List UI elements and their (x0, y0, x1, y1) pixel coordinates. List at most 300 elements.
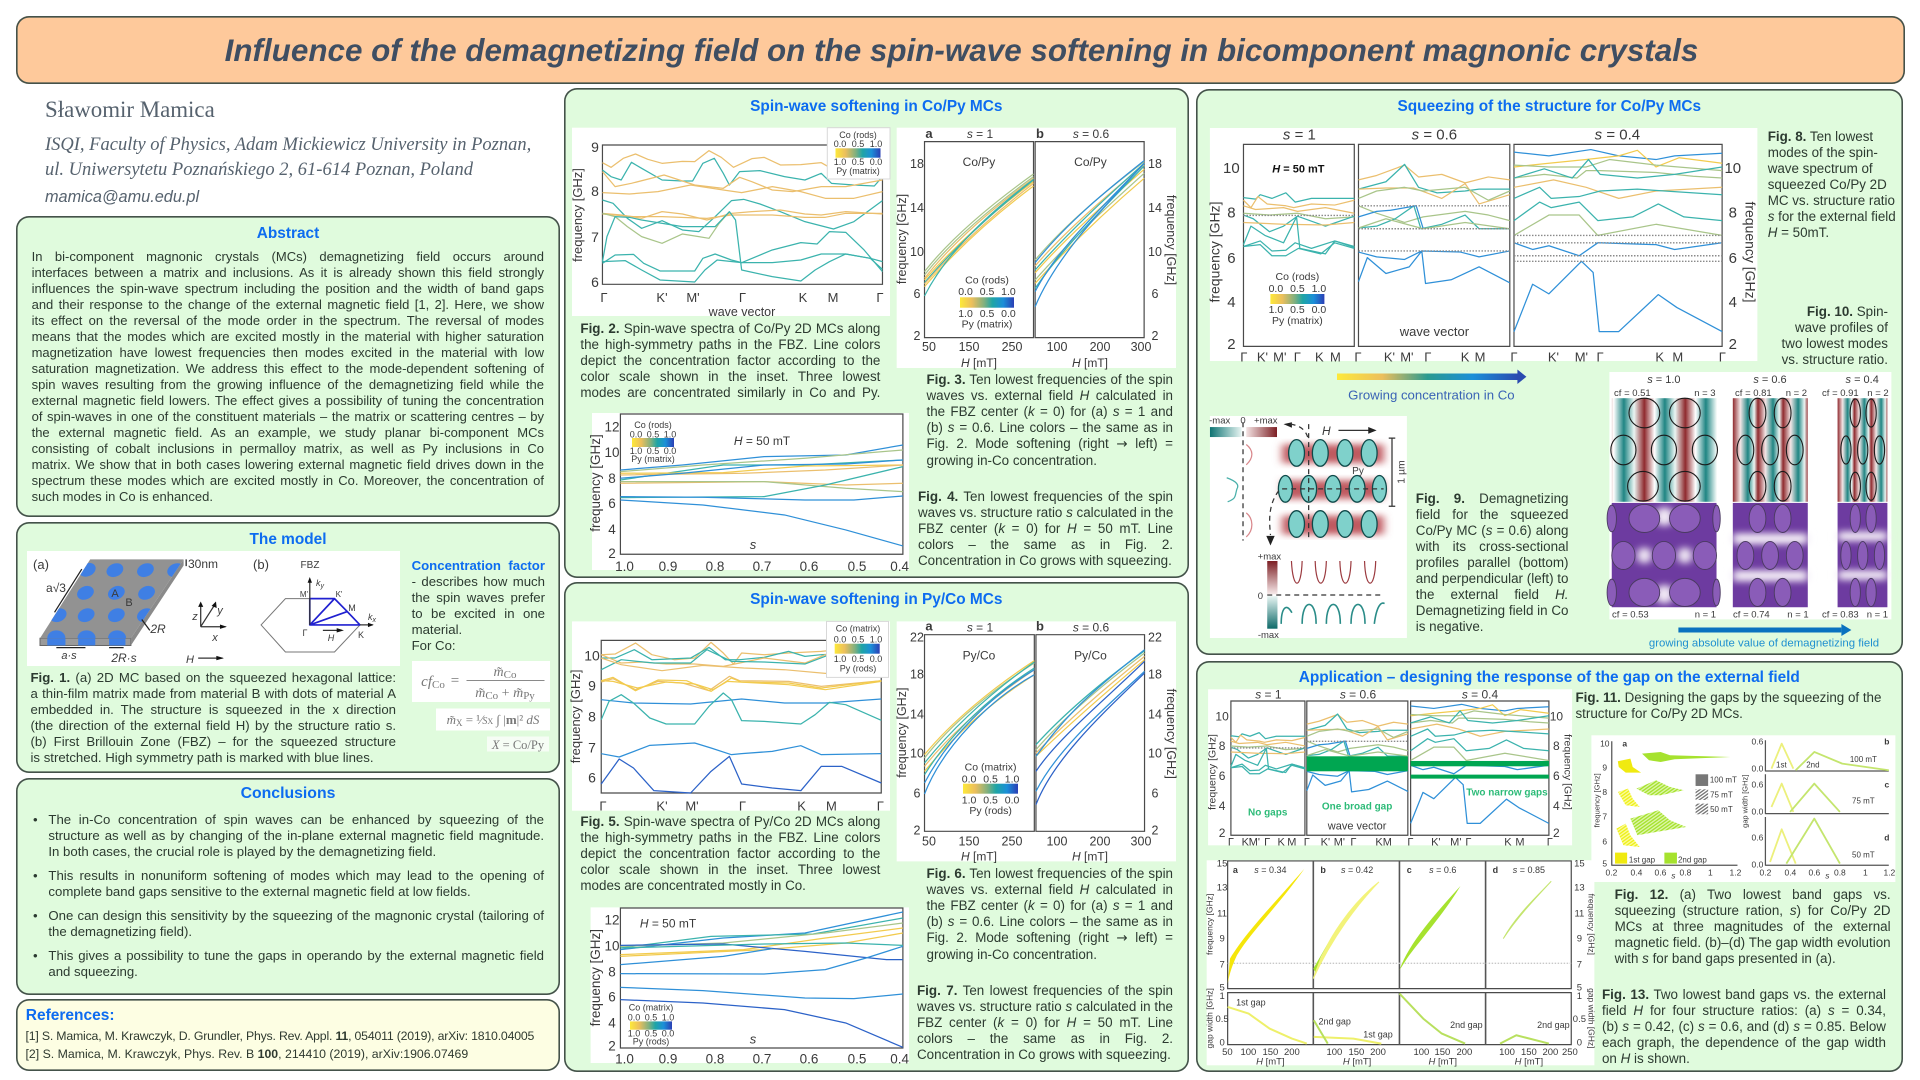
figure 7: frequency vs structure ratio: 0.6 (800, 1052, 818, 1067)
figure 13: gaps vs field: 0 (1219, 1037, 1224, 1048)
abstract text: interfaces between a matrix and inclusions. As it is already shown this field strongly (32, 265, 544, 280)
heading: application: Application – designing the response of the gap on the external field (1299, 669, 1800, 686)
figure 10 caption: vs. structure ratio. (1782, 352, 1888, 367)
figure 12: gaps vs squeezing: s (1671, 870, 1676, 880)
figure 8 caption: MC vs. structure ratio (1768, 193, 1895, 208)
figure 3 legend (958, 276, 1016, 331)
figure 8: squeezed spectra: 8 (1227, 205, 1235, 222)
figure 3: frequency vs field: H [mT] (961, 356, 997, 370)
figure 2: spectrum chart: wave vector (708, 305, 775, 319)
figure 12: gaps vs squeezing: s (1825, 870, 1830, 880)
figure 8: squeezed spectra: Γ (1510, 350, 1517, 365)
figure 5 legend: Co (matrix) (836, 624, 880, 634)
figure 5 caption: the high-symmetry paths in the FBZ. Line colors (580, 830, 880, 845)
figure 11: designing gaps: Γ (1546, 836, 1552, 848)
figure 3: frequency vs field: 18 (910, 157, 924, 171)
figure 4 caption (918, 489, 1173, 568)
figure 3: frequency vs field: 2 (914, 329, 921, 343)
figure 6 legend: Py (rods) (969, 806, 1012, 817)
figure 9 caption: and perpendicular (left) to (1416, 571, 1568, 586)
figure 9 caption: Co/Py MC (s = 0.6) along (1416, 523, 1568, 538)
figure 11: designing gaps: M (1382, 836, 1392, 848)
figure 8: squeezed spectra: K' (1383, 350, 1395, 365)
arrow: growing concentration (1337, 370, 1526, 402)
concentration factor text (412, 558, 545, 653)
figure 11: designing gaps: M' (1248, 836, 1260, 848)
figure 5: spectrum chart: Γ (877, 799, 884, 814)
bullet 1: structure as well as by changing of the in-plane external magnetic field magnitude. (48, 828, 544, 842)
figure 8: squeezed spectra: 6 (1227, 250, 1235, 267)
abstract text: its effect on the reversal of the mode order in the spectrum. The reversal of modes (32, 313, 544, 328)
figure 2: spectrum chart: K' (656, 290, 668, 305)
figure 12: gaps vs squeezing: c (1884, 779, 1889, 789)
figure 8: squeezed spectra: 10 (1724, 160, 1741, 177)
figure 3 legend: 0.0 0.5 1.0 (958, 287, 1016, 298)
bullet 4 (33, 948, 544, 978)
figure 12: gaps vs squeezing: 1st gap (1628, 855, 1655, 864)
figure 1 caption: Fig. 1. (a) 2D MC based on the squeezed hexagonal lattice: (30, 670, 396, 685)
references list (26, 1028, 534, 1060)
figure 12: gaps vs squeezing: b (1884, 736, 1889, 746)
bullet 2: This results in nonuniform softening of modes which may lead to the opening of (48, 868, 544, 882)
figure 7: frequency vs structure ratio: 0.8 (706, 1052, 724, 1067)
figure 4: frequency vs structure ratio: 0.8 (706, 559, 724, 574)
figure 6: frequency vs field: s = 0.6 (1073, 621, 1109, 635)
figure 11: designing gaps: M (1515, 836, 1524, 848)
figure 11: designing gaps: 8 (1218, 738, 1225, 752)
figure 8 caption: wave spectrum of (1768, 161, 1873, 176)
figure 13: gaps vs field: 2nd gap (1450, 1019, 1482, 1029)
figure 12: gaps vs squeezing: 75 mT (1852, 796, 1874, 805)
figure 12: gaps vs squeezing: 0.6 (1751, 779, 1763, 789)
figure 9 caption: field for the squeezed (1416, 507, 1568, 522)
figure 12 caption: squeezing (structure ration, s) for Co/Py 2D (1615, 903, 1891, 918)
figure 6: frequency vs field: 22 (1148, 631, 1162, 645)
figure 13: gaps vs field: 9 (1576, 933, 1582, 944)
figure 8: squeezed spectra: M' (1400, 350, 1413, 365)
figure 8: squeezed spectra: s = 1 (1283, 127, 1315, 144)
figure 6 caption: Fig. 6. Ten lowest frequencies of the spin (926, 866, 1173, 881)
figure 10 caption: wave profiles of (1795, 320, 1888, 335)
figure 12: gaps vs squeezing: 2nd gap (1678, 855, 1707, 864)
figure 6: frequency vs field: 18 (1148, 668, 1162, 682)
figure 13: gaps vs field: 1st gap (1236, 997, 1265, 1007)
conclusions list (33, 812, 544, 978)
figure 7: frequency vs structure ratio: 12 (605, 913, 620, 928)
concentration factor text: material. (412, 622, 462, 637)
panel: spin-wave softening in Co/Py (564, 88, 1189, 578)
figure 6: frequency vs field: 50 (922, 835, 936, 849)
figure 4 caption: Concentration in Co grows with squeezing. (918, 553, 1172, 568)
figure 3: frequency vs field: 250 (1002, 340, 1022, 354)
figure 12 caption (1614, 887, 1891, 966)
figure 8: squeezed spectra: M (1330, 350, 1340, 365)
abstract text: of spin-waves in one of the constituent materials – the matrix or scattering centres – by (32, 409, 544, 424)
figure 13: gaps vs field: 150 (1348, 1046, 1364, 1057)
figure 11 caption: Fig. 11. Designing the gaps by the squeezing of the (1575, 690, 1881, 705)
figure 1: lattice and FBZ: x (211, 632, 218, 644)
figure 7: frequency vs structure ratio: 0.7 (753, 1052, 771, 1067)
figure 12: gaps vs squeezing: 1.2 (1883, 867, 1895, 877)
figure 7 legend: Py (rods) (633, 1037, 669, 1047)
figure 3: frequency vs field: 10 (910, 245, 924, 259)
affiliation: ISQI, Faculty of Physics, Adam Mickiewicz University in Poznan, (45, 135, 531, 155)
figure 11: designing gaps: 10 (1549, 709, 1563, 723)
figure 4 legend: 0.0 0.5 1.0 (630, 429, 676, 439)
figure 2: spectrum chart: M' (686, 290, 700, 305)
figure 12: gaps vs squeezing: frequency [GHz] (1592, 773, 1601, 827)
figure 7 caption: waves vs. structure ratio s calculated in the (917, 999, 1173, 1014)
figure 7 caption: FBZ center (k = 0) for H = 50 mT. Line (917, 1015, 1173, 1030)
figure 8: squeezed spectra: Γ (1718, 350, 1726, 365)
figure 11: designing gaps: 8 (1553, 738, 1560, 752)
figure 12: gaps vs squeezing: 0.0 (1751, 859, 1763, 869)
figure 13: gaps vs field: 1st gap (1363, 1029, 1392, 1039)
author block (44, 97, 531, 206)
figure 13: gaps vs field: 0.5 (1572, 1013, 1586, 1024)
figure 12: gaps vs squeezing: 6 (1602, 836, 1607, 846)
arrow: growing demagnetizing field (1648, 624, 1879, 649)
figure 10: spin-wave profiles: n = 2 (1867, 388, 1888, 399)
figure 11: designing gaps: Γ (1465, 836, 1471, 848)
figure 5: spectrum chart (568, 622, 890, 814)
figure 5 legend (826, 622, 888, 678)
equations: concentration factor: m̃ (475, 686, 485, 701)
figure 12: gaps vs squeezing: 75 mT (1710, 790, 1732, 799)
concentration factor text: - describes how much (412, 574, 545, 589)
figure 5 legend: 1.0 0.5 0.0 (834, 654, 882, 664)
figure 8: squeezed spectra: K' (1256, 350, 1268, 365)
figure 7: frequency vs structure ratio: 4 (608, 1016, 616, 1031)
figure 5 caption: modes are concentrated mostly in Co. (580, 878, 806, 893)
bullet 3 (33, 908, 544, 938)
figure 5: spectrum chart: frequency [GHz] (568, 670, 583, 764)
figure 11: designing gaps: 4 (1553, 798, 1560, 812)
bullet 1: • (33, 812, 38, 826)
figure 9: demagnetizing field: -max (1257, 630, 1279, 641)
figure 10: spin-wave profiles: n = 3 (1694, 388, 1715, 399)
figure 8: squeezed spectra: Γ (1424, 350, 1431, 365)
figure 6 caption: (b) s = 0.6. Line colors – the same as in (926, 914, 1173, 929)
figure 11: designing gaps: s = 1 (1255, 687, 1281, 701)
figure 8 caption (1768, 129, 1896, 240)
figure 13: gaps vs field: 250 (1562, 1046, 1577, 1057)
figure 13: gaps vs field: 5 (1219, 982, 1224, 993)
abstract text: external magnetic field lowers. The effect gives a possibility of tuning the concentration (32, 393, 544, 408)
equations: concentration factor: Co (485, 690, 499, 702)
figure 5: spectrum chart: 9 (588, 678, 596, 694)
figure 7 legend (628, 1003, 674, 1047)
figure 13: gaps vs field: gap width [GHz] (1204, 988, 1214, 1048)
figure 13 caption: each graph, the dependence of the gap width (1602, 1035, 1886, 1050)
panel: squeezing of the structure (1196, 89, 1903, 654)
figure 7 caption: Concentration in Co grows with squeezing. (917, 1047, 1171, 1062)
figure 8: squeezed spectra: M' (1574, 350, 1588, 365)
abstract text: spin waves resulting from the growing influence of the demagnetizing field while the (32, 377, 544, 392)
figure 13 caption: (b) s = 0.42, (c) s = 0.6, and (d) s = 0.85. Below (1602, 1019, 1886, 1034)
figure 7 legend: 1.0 0.5 0.0 (628, 1029, 674, 1039)
figure 6: frequency vs field: 250 (1002, 835, 1022, 849)
figure 1: lattice and FBZ: k (316, 578, 320, 588)
figure 8 caption: s for the external field (1768, 209, 1896, 224)
heading: Py/Co softening: Spin-wave softening in Py/Co MCs (750, 591, 1002, 608)
figure 7: frequency vs structure ratio: 10 (605, 939, 620, 954)
figure 6 caption: waves vs. external field H calculated in (926, 882, 1173, 897)
equations: concentration factor: m̃ (494, 665, 504, 680)
figure 13: gaps vs field: 15 (1216, 858, 1227, 869)
arrow: growing demagnetizing field: growing absolute value of demagnetizing field (1648, 637, 1879, 649)
figure 11: designing gaps: s = 0.6 (1339, 687, 1376, 701)
figure 9 caption: with its cross-sectional (1416, 539, 1568, 554)
figure 4: frequency vs structure ratio: s (750, 537, 757, 552)
references list: [1] S. Mamica, M. Krawczyk, D. Grundler, Phys. Rev. Appl. 11, 054011 (2019), arXiv: 1810.04005 (26, 1028, 534, 1042)
figure 13: gaps vs field (1204, 858, 1596, 1067)
figure 13: gaps vs field: 150 (1521, 1046, 1536, 1057)
figure 1: lattice and FBZ: a·s (61, 650, 77, 662)
figure 1: lattice and FBZ: z (191, 611, 198, 623)
figure 8: squeezed spectra: M (1474, 350, 1485, 365)
figure 1: lattice and FBZ: K (358, 630, 364, 640)
figure 8 legend: 0.0 0.5 1.0 (1268, 284, 1326, 295)
title text: Influence of the demagnetizing field on the spin-wave softening in bicomponent magnonic crystals (225, 33, 1698, 68)
figure 11: designing gaps: Two narrow gaps (1466, 787, 1548, 798)
figure 13: gaps vs field: 1 (1576, 990, 1582, 1001)
figure 9 caption: Fig. 9. Demagnetizing (1416, 491, 1568, 506)
figure 9 caption: profiles parallel (bottom) (1416, 555, 1568, 570)
figure 4 legend: 1.0 0.5 0.0 (630, 446, 676, 456)
figure 8: squeezed spectra: 2 (1227, 336, 1235, 353)
figure 6: frequency vs field: 14 (910, 708, 924, 722)
figure 4: frequency vs structure ratio: 4 (608, 522, 616, 537)
figure 4 legend (630, 420, 676, 464)
figure 6 caption (926, 866, 1173, 962)
figure 6: frequency vs field: 22 (910, 631, 924, 645)
bullet 3: the demagnetizing field). (48, 924, 192, 938)
figure 7: frequency vs structure ratio: 0.4 (890, 1052, 909, 1067)
figure 7: frequency vs structure ratio: 8 (608, 965, 616, 980)
figure 1: lattice and FBZ: H (186, 654, 194, 666)
equations: concentration factor: Co (504, 669, 517, 681)
figure 11: designing gaps: One broad gap (1321, 801, 1392, 812)
figure 3: frequency vs field: 50 (922, 340, 936, 354)
figure 11: designing gaps: 6 (1218, 768, 1225, 782)
figure 8: squeezed spectra: H = 50 mT (1272, 164, 1324, 176)
figure 12: gaps vs squeezing: 50 mT (1852, 850, 1874, 859)
equations: concentration factor (412, 661, 550, 752)
concentration factor text: the spin waves prefer (412, 590, 545, 605)
figure 11: designing gaps: 4 (1218, 798, 1225, 812)
figure 12: gaps vs squeezing: 7 (1602, 811, 1607, 821)
figure 4: frequency vs structure ratio: 0.6 (800, 559, 818, 574)
figure 8: squeezed spectra: 8 (1728, 205, 1737, 222)
figure 10: spin-wave profiles: n = 1 (1866, 609, 1888, 620)
figure 6: frequency vs field: 200 (1090, 835, 1110, 849)
figure 6: frequency vs field: 300 (1131, 835, 1151, 849)
figure 12 caption: with s for band gaps presented in (a). (1615, 951, 1836, 966)
figure 8: squeezed spectra: wave vector (1398, 324, 1469, 339)
figure 5: spectrum chart: Γ (739, 799, 746, 814)
figure 1: lattice and FBZ: a√3 (46, 581, 66, 595)
figure 1: lattice and FBZ: H (328, 633, 335, 643)
figure 3: frequency vs field: frequency [GHz] (895, 194, 909, 284)
figure 13: gaps vs field: 0 (1576, 1037, 1582, 1048)
bullet 2 (33, 868, 544, 898)
figure 6 legend: 1.0 0.5 0.0 (962, 796, 1020, 807)
figure 13: gaps vs field: frequency [GHz] (1204, 893, 1214, 955)
figure 12: gaps vs squeezing: 0.0 (1751, 763, 1763, 773)
figure 12: gaps vs squeezing: 50 mT (1710, 805, 1732, 814)
figure 8: squeezed spectra: frequency [GHz] (1206, 201, 1222, 303)
figure 13: gaps vs field: c (1406, 864, 1411, 874)
figure 1: lattice and FBZ: B (125, 597, 133, 609)
figure 13: gaps vs field: 11 (1574, 908, 1584, 919)
figure 8 legend: Py (matrix) (1272, 316, 1322, 327)
figure 1 caption: embedded in. The structure is squeezed in the x direction (30, 702, 396, 717)
figure 5: spectrum chart: M (826, 799, 837, 814)
figure 13: gaps vs field: 0.5 (1215, 1013, 1228, 1024)
figure 9 caption: the external field H. (1416, 587, 1568, 602)
figure 11: designing gaps: K (1375, 836, 1383, 848)
figure 4 legend: Py (matrix) (631, 454, 675, 464)
figure 10: spin-wave profiles: cf = 0.74 (1733, 609, 1769, 620)
equations: concentration factor: Co (432, 679, 445, 691)
bullet 1: The in-Co concentration of spin waves can be enhanced by squeezing of the (48, 812, 544, 826)
figure 11: designing gaps: 6 (1553, 768, 1560, 782)
figure 13: gaps vs field: 200 (1370, 1046, 1386, 1057)
figure 1: lattice and FBZ: M (348, 603, 356, 613)
figure 10 caption: Fig. 10. Spin- (1807, 304, 1888, 319)
figure 6 caption: the FBZ center (k = 0) for (a) s = 1 and (926, 898, 1173, 913)
figure 11: designing gaps: 2 (1553, 826, 1560, 840)
figure 11: designing gaps: frequency [GHz] (1561, 734, 1572, 810)
figure 13: gaps vs field: 9 (1219, 933, 1224, 944)
figure 4: frequency vs structure ratio: H = 50 mT (734, 434, 791, 448)
figure 6 caption: Fig. 2. Mode softening (right → left) = (926, 930, 1173, 946)
figure 11: designing gaps: K' (1320, 836, 1330, 848)
figure 6: frequency vs field: frequency [GHz] (1164, 689, 1178, 779)
figure 7 caption (917, 983, 1173, 1062)
figure 13: gaps vs field: frequency [GHz] (1586, 893, 1596, 955)
figure 13 caption: Fig. 13. Two lowest band gaps vs. the external (1602, 987, 1886, 1002)
figure 5 legend: 0.0 0.5 1.0 (834, 635, 882, 645)
figure 2: spectrum chart: Γ (876, 290, 884, 305)
figure 12: gaps vs squeezing: 9 (1602, 762, 1607, 772)
figure 11: designing gaps: K (1504, 836, 1512, 848)
figure 8: squeezed spectra: s = 0.6 (1411, 127, 1457, 144)
figure 8 caption: modes of the spin- (1768, 145, 1878, 160)
figure 3 caption: Fig. 2. Mode softening (right → left) = (926, 436, 1173, 452)
figure 13 caption (1602, 987, 1886, 1066)
bullet 1 (33, 812, 544, 858)
figure 9 caption: Demagnetizing field in Co (1416, 603, 1568, 618)
figure 3: frequency vs field: s = 1 (967, 127, 993, 141)
figure 13: gaps vs field: b (1320, 864, 1326, 874)
equations: concentration factor: X = Co/Py (491, 738, 545, 752)
references list: [2] S. Mamica, M. Krawczyk, Phys. Rev. B 100, 214410 (2019), arXiv:1906.07469 (26, 1046, 468, 1060)
figure 8: squeezed spectra: 2 (1728, 336, 1737, 353)
figure 2 legend (827, 128, 890, 179)
figure 11: designing gaps: K (1277, 836, 1285, 848)
figure 12: gaps vs squeezing: 1.2 (1729, 867, 1741, 877)
figure 7 caption: colors – the same as in Fig. 2. (917, 1031, 1173, 1046)
panel: conclusions (16, 778, 560, 994)
bullet 4: This gives a possibility to tune the gaps in operando by the external magnetic field (48, 948, 544, 962)
figure 11: designing gaps: Γ (1303, 836, 1309, 848)
figure 12 caption: Fig. 12. (a) Two lowest band gaps vs. (1615, 887, 1891, 902)
figure 6: frequency vs field: Py/Co (963, 649, 996, 663)
figure 1: lattice and FBZ (27, 551, 400, 666)
figure 11: designing gaps: frequency [GHz] (1207, 734, 1218, 810)
figure 11: designing gaps: Γ (1407, 836, 1413, 848)
bullet 1: In both cases, the crucial role is played by the demagnetizing field. (48, 844, 436, 858)
panel: references (16, 999, 560, 1071)
figure 3: frequency vs field: 2 (1152, 329, 1159, 343)
figure 2: spectrum chart: frequency [GHz] (570, 168, 585, 262)
figure 8 legend: Co (rods) (1275, 272, 1319, 283)
figure 6: frequency vs field: 10 (910, 747, 924, 761)
abstract text: means that the modes which are excited mostly in the material with higher saturation (32, 329, 544, 344)
figure 10 caption (1782, 304, 1888, 367)
figure 12: gaps vs squeezing: 10 (1600, 738, 1609, 748)
figure 13: gaps vs field: s = 0.34 (1254, 864, 1286, 874)
figure 13: gaps vs field: 200 (1542, 1046, 1558, 1057)
figure 10: spin-wave profiles: cf = 0.91 (1822, 388, 1858, 399)
figure 3: frequency vs field: Co/Py (1074, 155, 1107, 169)
figure 6: frequency vs field (895, 619, 1178, 864)
figure 6: frequency vs field: 10 (1148, 747, 1162, 761)
panel: spin-wave softening in Py/Co (564, 582, 1189, 1072)
figure 6: frequency vs field: H [mT] (1072, 850, 1108, 864)
equations: concentration factor: m̃ (513, 686, 523, 701)
figure 11: designing gaps: 2 (1218, 826, 1225, 840)
figure 5: spectrum chart: M' (685, 799, 699, 814)
figure 13: gaps vs field: 13 (1216, 882, 1227, 893)
figure 4 caption: colors – the same as in Fig. 2. (918, 537, 1173, 552)
figure 10: spin-wave profiles (1607, 372, 1891, 620)
figure 8: squeezed spectra: Γ (1596, 350, 1603, 365)
figure 9: demagnetizing field: +max (1257, 551, 1281, 562)
figure 3 legend: Py (matrix) (962, 320, 1012, 331)
figure 13: gaps vs field: s = 0.42 (1341, 864, 1373, 874)
figure 8: squeezed spectra: Γ (1293, 350, 1301, 365)
figure 2 caption: the high-symmetry paths in the FBZ. Line colors (580, 337, 880, 352)
figure 13: gaps vs field: 100 (1326, 1046, 1342, 1057)
figure 13: gaps vs field: 7 (1576, 959, 1582, 970)
figure 9: demagnetizing field: H (1322, 424, 1331, 438)
figure 3: frequency vs field: H [mT] (1072, 356, 1108, 370)
figure 6: frequency vs field: 18 (910, 668, 924, 682)
figure 7: frequency vs structure ratio: 6 (608, 990, 616, 1005)
figure 8: squeezed spectra: M' (1273, 350, 1286, 365)
figure 10: spin-wave profiles: cf = 0.83 (1822, 609, 1858, 620)
figure 12: gaps vs squeezing: 2nd (1806, 760, 1819, 769)
figure 1: lattice and FBZ: x (372, 617, 376, 624)
figure 4: frequency vs structure ratio: 0.5 (848, 559, 866, 574)
figure 12 caption: magnetic field. (b)–(d) The gap width evolution (1615, 935, 1891, 950)
author name: Sławomir Mamica (45, 97, 215, 122)
figure 11: designing gaps: No gaps (1248, 807, 1287, 818)
affiliation (44, 135, 531, 180)
figure 1: lattice and FBZ: k (368, 612, 372, 622)
figure 10: spin-wave profiles: s = 1.0 (1647, 374, 1680, 386)
figure 11: designing gaps: M (1287, 836, 1296, 848)
figure 6: frequency vs field: a (925, 619, 933, 634)
figure 13: gaps vs field: 100 (1240, 1046, 1256, 1057)
figure 12: gaps vs squeezing: 1st (1776, 760, 1787, 769)
figure 1 caption (30, 670, 396, 765)
abstract text (32, 249, 544, 504)
figure 6: frequency vs field: b (1036, 619, 1044, 634)
